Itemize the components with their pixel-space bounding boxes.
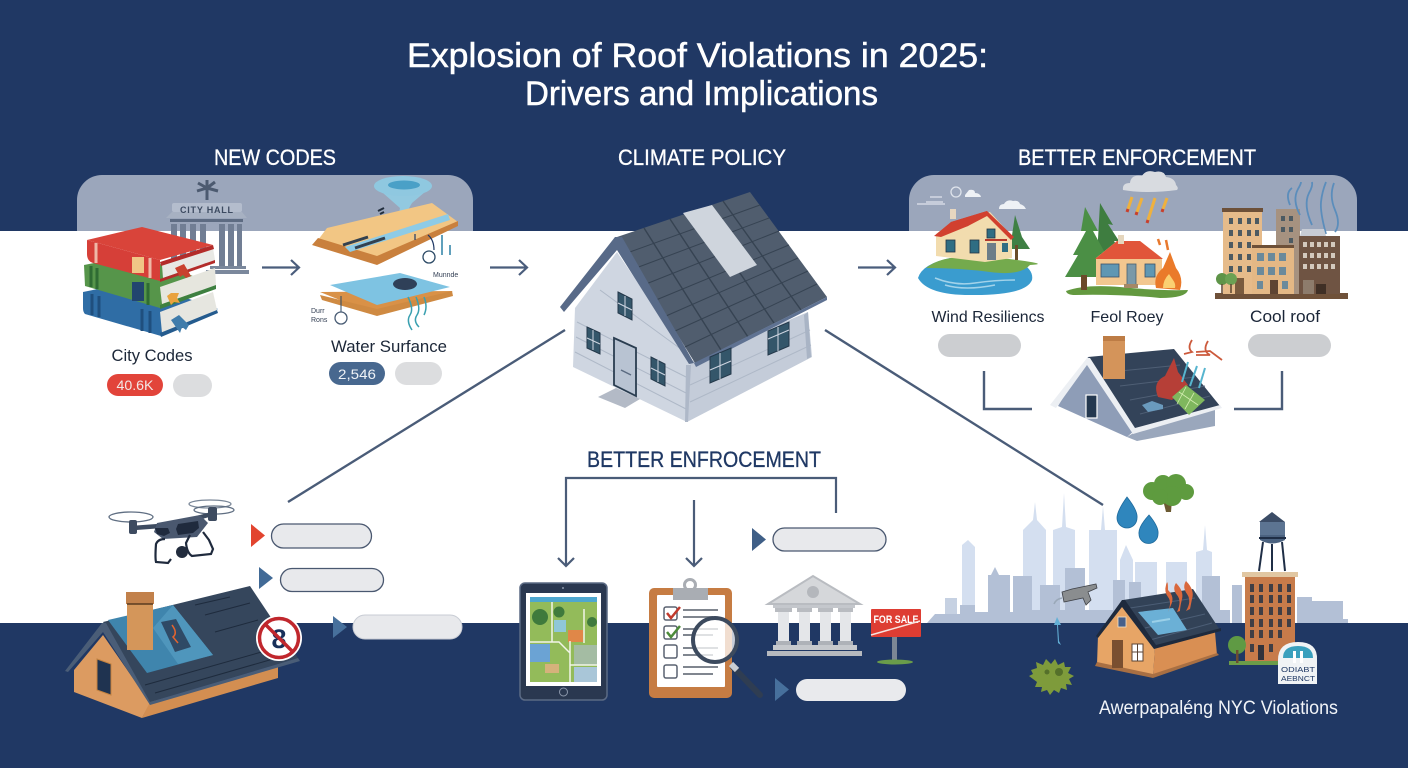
icon: water drops [1117, 497, 1158, 544]
skyline [927, 493, 1348, 623]
pill: cool roof blank [1248, 334, 1331, 357]
icon: water tower building [1228, 512, 1298, 665]
icon: bank [767, 576, 862, 656]
pill: wind blank [938, 334, 1021, 357]
bracket: left to roof [984, 371, 1032, 409]
icon: leaking nozzle [1054, 584, 1097, 645]
list item: drone finding 3 [333, 615, 462, 639]
icon: wind house on island [917, 187, 1038, 295]
icon: prohibition sign: 8 [271, 624, 287, 654]
icon: city hall: CITY HALL [180, 205, 234, 215]
title: Drivers and Implications [525, 75, 878, 113]
label: cool roof: Cool roof [1250, 307, 1320, 326]
icon: prohibition sign [256, 615, 302, 661]
icon: drone [109, 500, 234, 563]
list item: drone finding 2 [259, 567, 384, 592]
heading: better enfrocement center: BETTER ENFROCEMENT [587, 447, 821, 472]
icon: for sale sign: FOR SALE [874, 614, 918, 626]
icon: mold patch [1029, 659, 1074, 695]
arrow: house to resilience [858, 260, 895, 275]
icon: house with wildfire [1065, 171, 1188, 298]
icon: roof membrane with tornado: Munnde [433, 272, 458, 279]
icon: city hall [166, 180, 249, 274]
panel: new codes backdrop [77, 175, 473, 231]
pill: city codes blank [173, 374, 212, 397]
connector: house to drone [288, 330, 565, 502]
connector: house to city [825, 330, 1103, 505]
icon: stack of books [83, 227, 218, 337]
title [407, 37, 988, 113]
badge: water surface count: 2,546 [338, 366, 376, 382]
list item: enforcement top [752, 528, 886, 551]
title: Explosion of Roof Violations in 2025: [407, 37, 988, 75]
icon: roof membrane with tornado [311, 176, 458, 330]
arrow: surface to house [490, 260, 527, 275]
icon: agency badge [1278, 642, 1317, 684]
icon: tree [1143, 474, 1194, 512]
label: feol roey: Feol Roey [1090, 309, 1164, 326]
label: wind resilience: Wind Resiliencs [932, 309, 1044, 326]
label: water surface: Water Surfance [331, 337, 447, 356]
icon: tablet map [520, 583, 607, 700]
caption: city violations: Awerpapaléng NYC Violations [1099, 698, 1338, 719]
icon: damaged roof [1050, 336, 1222, 441]
icon: roof membrane with tornado: Rons [311, 317, 328, 324]
pill: water surface blank [395, 362, 442, 385]
arrow: codes to surface [262, 260, 299, 275]
icon: central house [560, 192, 827, 422]
icon: roof membrane with tornado: Durr [311, 308, 325, 315]
icon: city buildings heat [1215, 182, 1348, 299]
bracket: enforcement connectors [558, 478, 836, 566]
icon: failed roof house [65, 586, 300, 718]
badge: city codes count [107, 374, 163, 396]
panel: better enforcement backdrop [909, 175, 1357, 231]
badge: city codes count: 40.6K [116, 377, 154, 393]
heading: new codes: NEW CODES [214, 145, 336, 170]
bracket: right to roof [1234, 371, 1282, 409]
heading: better enforcement top: BETTER ENFORCEMENT [1018, 145, 1256, 170]
heading: climate policy: CLIMATE POLICY [618, 145, 786, 170]
icon: checklist with magnifier [649, 580, 760, 698]
icon: agency badge: AEBNCT [1281, 674, 1315, 683]
list item: enforcement bottom [775, 678, 906, 701]
list item: drone finding 1 [251, 524, 372, 548]
label: city codes: City Codes [112, 346, 192, 365]
icon: agency badge: ODIABT [1281, 665, 1316, 674]
icon: for sale sign [871, 609, 921, 664]
badge: water surface count [329, 362, 385, 385]
icon: house with solar and heat [1095, 581, 1221, 678]
